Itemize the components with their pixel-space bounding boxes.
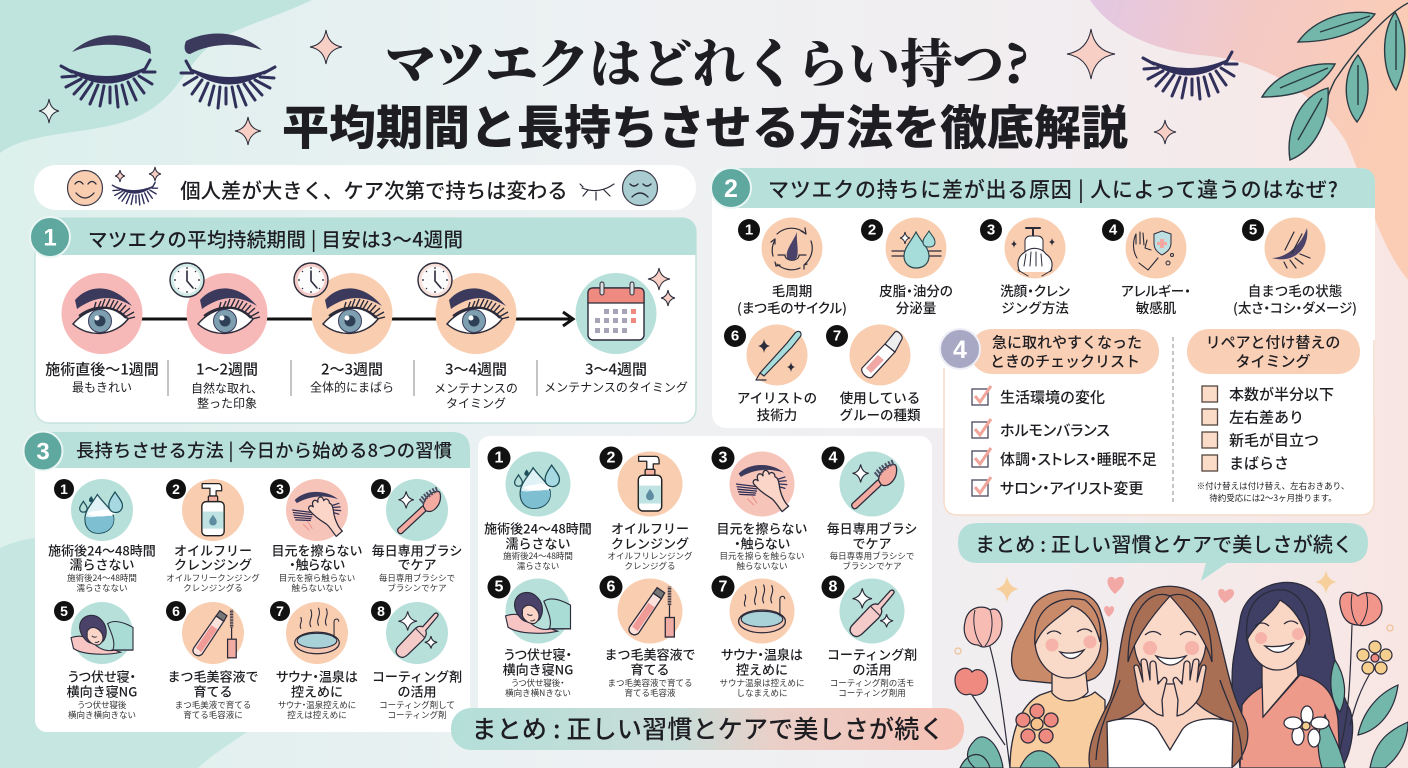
stage 2 [170, 263, 268, 412]
habit card 6: まつ毛美容液で [604, 644, 696, 664]
habit 8: 8 [377, 603, 385, 619]
checklist right [1202, 384, 1334, 474]
panel: section 3 [24, 432, 470, 732]
stage 1: 施術直後〜1週間 [45, 358, 159, 380]
checklist left [972, 386, 1157, 498]
icon: sparse lashes [580, 184, 614, 200]
cause 7: グルーの種類 [840, 404, 921, 424]
stage 4: 3〜4週間 [445, 358, 507, 380]
checklist right: まばらさ [1229, 452, 1289, 474]
habit card 4: ブラシンでケア [842, 560, 902, 572]
habit 1: 濡らさなない [76, 582, 128, 594]
cause 3: 洗顔・クレン [1000, 280, 1070, 300]
cause 6: 技術力 [757, 404, 797, 424]
heading 2: マツエクの持ちに差が出る原因 | 人によって違うのはなぜ? [768, 174, 1338, 204]
icon: smiling face [68, 170, 102, 206]
cause 2: 2 [868, 222, 876, 238]
habit 5 [54, 601, 137, 721]
habit 1: 施術後24〜48時間 [48, 540, 156, 560]
habit card 8: コーティング剤 [827, 644, 917, 664]
habit card 2 [600, 446, 693, 572]
habit card 1: 1 [495, 450, 504, 466]
habit 1: 施術後24〜48時間 [67, 572, 137, 584]
habit 2: オイルフリークンジング [166, 572, 260, 584]
habit card 7: サウナ温泉は控えめに [719, 677, 805, 689]
habit 7 [270, 601, 358, 721]
footnote [1197, 480, 1349, 504]
woman middle [1089, 586, 1248, 768]
habit card 5 [488, 576, 573, 699]
flowers left [955, 607, 1060, 768]
habit card 3: 触らないない [736, 560, 788, 572]
badge 2: 2 [724, 175, 738, 203]
cause 1: (まつ毛のサイクル) [737, 297, 847, 317]
cause 1: 毛周期 [772, 280, 812, 300]
habit 3: 目元を擦らない [271, 540, 363, 560]
heading 1: マツエクの平均持続期間 | 目安は3〜4週間 [88, 224, 463, 252]
checklist right: 本数が半分以下 [1229, 384, 1334, 404]
leaves [1262, 3, 1408, 160]
heading 4 right [1187, 329, 1360, 374]
heading 4 left: 急に取れやすくなった [992, 332, 1142, 352]
habit 1: 濡らさない [69, 554, 135, 574]
habit 3: 触らないない [291, 582, 343, 594]
habit card 4: 4 [829, 450, 838, 466]
cause 7 [826, 324, 921, 424]
habit 6: まつ毛美液で育てる [175, 699, 251, 711]
habit card 3: ・触らない [734, 534, 790, 552]
habit card 4 [822, 446, 917, 572]
stage 4: メンテナンスの [434, 380, 518, 396]
cause 1 [737, 218, 847, 317]
cause 3: ジング方法 [1001, 297, 1069, 317]
icon: sad face [622, 170, 658, 206]
badge 2 [711, 168, 751, 208]
checklist left: 体調・ストレス・睡眠不足 [1000, 448, 1157, 470]
speech bubble summary [958, 523, 1368, 581]
footnote: ※付け替えは付け替え、左右おきあり、 [1197, 480, 1349, 492]
cause 2: 皮脂・油分の [879, 280, 953, 300]
habit card 6 [600, 576, 696, 699]
habit 5: 横向き横向きない [68, 709, 136, 721]
habit 8: コーティング剤 [372, 666, 462, 686]
habit card 6: 育てる [630, 660, 670, 678]
habit card 2: クレンジング [611, 534, 689, 552]
habit 7: 7 [276, 603, 284, 619]
habit 6 [166, 601, 259, 721]
panel: section 1 [30, 217, 696, 423]
stage 2: 1〜2週間 [196, 358, 258, 380]
bottom summary banner: まとめ : 正しい習慣とケアで美しさが続く [472, 710, 944, 746]
habit 3: 目元を擦ら触らない [279, 572, 355, 584]
title: 平均期間と長持ちさせる方法を徹底解説 [282, 90, 1128, 158]
habit card 4: 毎日専専用ブラシシで [830, 550, 914, 562]
habit 5: 5 [60, 603, 68, 619]
heading 3: 長持ちさせる方法 | 今日から始める8つの習慣 [76, 437, 452, 463]
habit 8: コーティング剤して [379, 699, 455, 711]
woman left [1010, 590, 1108, 768]
habit 7: 控えめに [291, 682, 343, 700]
habit 5: 横向き寝NG [67, 682, 137, 700]
habit 1 [48, 479, 156, 594]
badge 3 [24, 432, 62, 470]
habit card 4: でケア [852, 534, 892, 552]
habit 7: サウナ・温泉控えめに [278, 699, 356, 711]
stage 3: 全体的にまばら [310, 378, 394, 396]
habit card 2: クレンジグる [624, 560, 676, 572]
heading 4 right: リペアと付け替えの [1206, 332, 1340, 352]
hearts and stars [1104, 577, 1234, 617]
badge 1: 1 [43, 224, 57, 252]
timeline arrow [140, 312, 573, 326]
badge 3: 3 [36, 438, 50, 466]
cause 5: 自まつ毛の状態 [1248, 280, 1343, 300]
speech bubble summary: まとめ : 正しい習慣とケアで美しさが続く [975, 528, 1353, 558]
stage 5 calendar: 3〜4週間 [585, 358, 647, 380]
woman right [1232, 582, 1353, 768]
cause 4: アレルギー・ [1121, 280, 1191, 300]
heading 4 left: ときのチェックリスト [990, 350, 1140, 372]
habit card 2: オイルフリー [611, 518, 689, 538]
closed eye left with brow [61, 35, 155, 107]
cause 4: 敏感肌 [1136, 297, 1177, 317]
habit card 5: 5 [495, 578, 504, 596]
habit 4: 4 [377, 481, 385, 497]
panel: habits duplicate [478, 436, 932, 721]
habit 6: 育てる [193, 682, 233, 700]
habit 3: ・触らない [289, 554, 345, 574]
cause 7: 7 [833, 328, 841, 344]
habit card 6: 6 [607, 578, 616, 596]
habit 2: オイルフリー [174, 540, 252, 560]
habit 4: ブラシンでケア [387, 582, 447, 594]
habit card 7: 7 [719, 578, 728, 596]
habit card 3: 目元を擦らを触らない [719, 550, 805, 562]
closed eye far right [1143, 52, 1237, 99]
habit card 6: まつ毛美容液で育てる [607, 677, 693, 689]
panel: section 2 [711, 168, 1375, 428]
checklist right: 新毛が目立つ [1229, 430, 1319, 450]
flowers right [1284, 592, 1408, 768]
habit card 3: 3 [719, 450, 728, 466]
footnote: 待約受応には2〜3ヶ月掛ります。 [1209, 492, 1337, 504]
stage 2: 整った印象 [197, 394, 257, 412]
habit 2 [166, 479, 260, 594]
habit card 1: 濡らさない [505, 534, 571, 552]
habit 6: まつ毛美容液で [167, 666, 259, 686]
badge 4 [940, 329, 980, 369]
habit card 8 [822, 576, 917, 699]
stage 4: タイミング [446, 394, 506, 412]
icon: lashes with sparkles [112, 167, 161, 205]
stage 1 [45, 273, 159, 396]
stage 3: 2〜3週間 [321, 358, 383, 380]
checklist right: 左右差あり [1229, 406, 1304, 428]
title: マツエクはどれくらい持つ? [384, 22, 1030, 98]
cause 4 [1102, 218, 1191, 317]
illustration: three women with flowers [955, 570, 1408, 768]
checklist left: サロン・アイリスト変更 [1000, 478, 1143, 498]
checklist left: ホルモンバランス [1000, 420, 1110, 440]
habit card 3 [712, 446, 808, 572]
habit 8: コーティング剤 [388, 709, 446, 721]
habit 2: クレンジングる [183, 582, 243, 594]
habit card 7: サウナ・温泉は [721, 644, 803, 664]
cause 1: 1 [745, 222, 753, 238]
habit card 5: 横向き寝NG [503, 660, 573, 678]
habit 3 [270, 479, 363, 594]
stage 2: 自然な取れ、 [191, 380, 263, 396]
closed eye right with brow [181, 34, 275, 108]
stage 5 calendar: メンテナンスのタイミング [544, 378, 688, 396]
habit card 6: 育てる毛容液 [624, 687, 676, 699]
habit card 4: 毎日専用ブラシ [827, 518, 917, 538]
habit 4: 毎日専用ブラシシで [379, 572, 455, 584]
cause 5: 5 [1249, 222, 1257, 238]
cause 3: 3 [987, 222, 995, 238]
habit card 3: 目元を擦らない [716, 518, 808, 538]
habit card 8: コーティング剤用 [838, 687, 906, 699]
habit card 8: コーティング剤の活モ [830, 677, 914, 689]
habit 5: うつ伏せ寝後 [78, 699, 127, 711]
title [282, 22, 1128, 158]
habit card 7: しなまえめに [736, 687, 788, 699]
habit 2: クレンジング [174, 554, 252, 574]
cause 5 [1233, 218, 1357, 317]
subtitle text: 個人差が大きく、ケア次第で持ちは変わる [180, 174, 568, 204]
cause 6: 6 [731, 328, 739, 344]
habit 6: 育てる毛容液に [183, 709, 243, 721]
habit card 5: 横向き横Nきない [505, 687, 571, 699]
habit card 1 [484, 446, 592, 572]
habit 2: 2 [172, 481, 180, 497]
habit 8 [371, 601, 462, 721]
habit card 8: 8 [829, 578, 838, 596]
habit 8: の活用 [397, 682, 437, 700]
sparkles [39, 29, 1176, 145]
habit card 5: うつ伏せ寝後・ [512, 677, 564, 689]
stage 3 [294, 263, 394, 396]
habit card 8: の活用 [852, 660, 892, 678]
habit card 2: 2 [607, 450, 616, 466]
cause 2: 分泌量 [896, 297, 936, 317]
habit 5: うつ伏せ寝・ [68, 666, 136, 686]
cause 7: 使用している [840, 387, 920, 407]
panel: section 4 checklist [940, 329, 1374, 515]
cause 6 [724, 324, 817, 424]
habit card 7 [712, 576, 805, 699]
badge 4: 4 [953, 336, 967, 364]
habit card 5: うつ伏せ寝・ [504, 644, 572, 664]
checklist left: 生活環境の変化 [1000, 386, 1105, 408]
heading 4 right: タイミング [1235, 350, 1311, 372]
habit card 2: オイルフリレンジング [607, 550, 693, 562]
habit 4: でケア [397, 554, 437, 574]
habit card 1: 濡らさない [517, 560, 559, 572]
habit card 1: 施術後24〜48時間 [503, 550, 573, 562]
habit card 7: 控えめに [736, 660, 788, 678]
cause 3 [980, 218, 1070, 317]
subtitle pill [34, 165, 696, 210]
badge 1 [30, 217, 70, 257]
stage 5 calendar [544, 268, 688, 396]
cause 2 [861, 218, 953, 317]
habit 1: 1 [60, 481, 68, 497]
stage 1: 最もきれい [72, 378, 132, 396]
habit 7: 控えは控えめに [287, 709, 347, 721]
habit 3: 3 [276, 481, 284, 497]
cause 4: 4 [1109, 222, 1118, 238]
habit card 1: 施術後24〜48時間 [484, 518, 592, 538]
stage 4 [418, 263, 518, 412]
cause 6: アイリストの [737, 387, 817, 407]
habit 7: サウナ・温泉は [276, 666, 358, 686]
habit 6: 6 [172, 603, 180, 619]
habit 4: 毎日専用ブラシ [372, 540, 462, 560]
cause 5: (太さ・コシ・ダメージ) [1233, 297, 1357, 317]
habit 4 [371, 479, 462, 594]
heading 4 left [970, 329, 1159, 374]
